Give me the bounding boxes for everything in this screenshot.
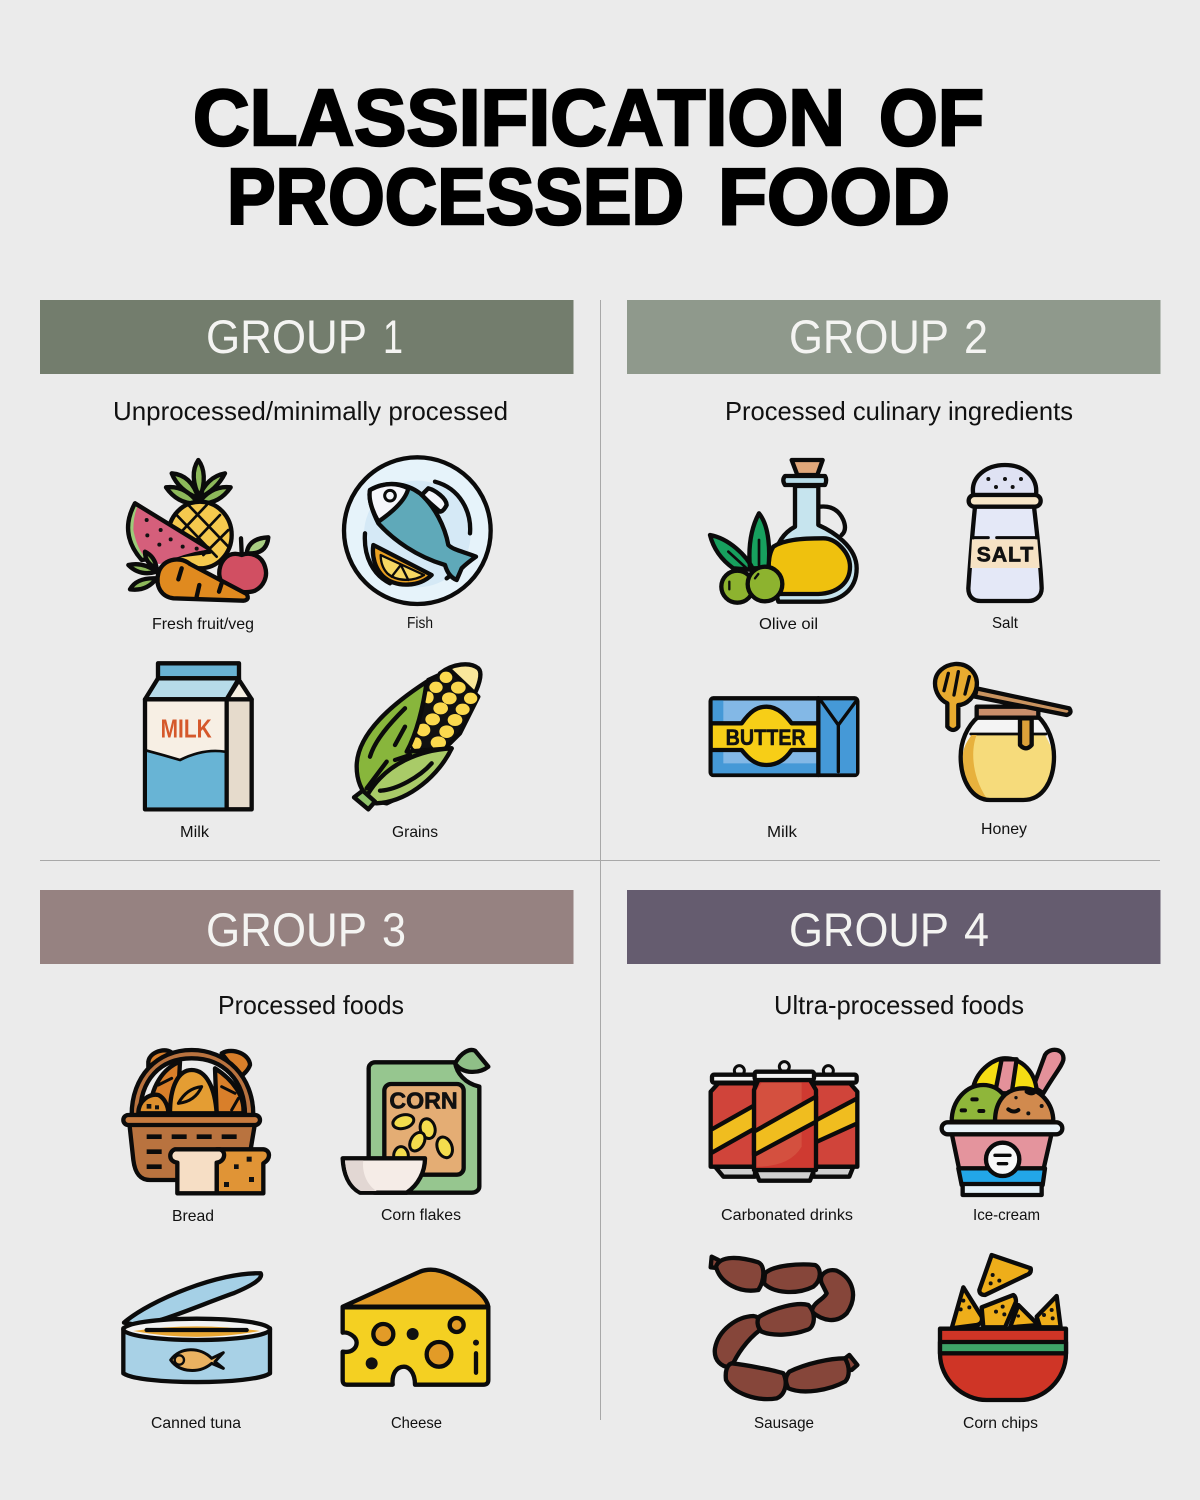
label: fresh fruit/veg: Fresh fruit/veg — [152, 616, 254, 633]
group 3 subtitle: Processed foods — [218, 990, 404, 1020]
title: PROCESSED — [227, 152, 684, 241]
panel: group 2 — [627, 300, 1160, 841]
label: olive oil: Olive oil — [759, 616, 818, 633]
group 4 subtitle: Ultra-processed foods — [774, 990, 1024, 1020]
icon: carbonated drink cans — [711, 1062, 857, 1181]
icon: ice cream cup — [942, 1050, 1063, 1195]
group 2 header: 2 — [964, 310, 988, 363]
label: carbonated drinks: Carbonated drinks — [721, 1207, 853, 1224]
label: canned tuna: Canned tuna — [151, 1415, 241, 1432]
group 2 subtitle: Processed culinary ingredients — [725, 396, 1073, 426]
label: butter (captioned Milk): Milk — [767, 824, 798, 841]
icon: corn chips bowl — [940, 1255, 1066, 1400]
label: corn chips: Corn chips — [963, 1415, 1038, 1432]
title: CLASSIFICATION — [193, 73, 845, 162]
group 4 header — [627, 890, 1160, 964]
label: sausage: Sausage — [754, 1415, 814, 1432]
icon: bread basket — [123, 1050, 269, 1193]
icon: sausages — [711, 1257, 857, 1399]
title: OF — [879, 73, 984, 162]
icon: olive oil — [710, 460, 857, 603]
label: honey: Honey — [981, 821, 1027, 838]
title: FOOD — [718, 152, 950, 241]
panel: group 1 — [40, 300, 574, 841]
label: bread: Bread — [172, 1208, 214, 1225]
icon: milk carton: MILK — [161, 714, 212, 744]
icon: canned tuna — [123, 1273, 270, 1382]
icon: corn flakes box: CORN — [389, 1088, 458, 1114]
icon: corn flakes box — [343, 1050, 488, 1193]
label: grains: Grains — [392, 824, 438, 841]
group 2 header: GROUP — [789, 310, 949, 363]
group 1 header: 1 — [383, 310, 403, 363]
label: corn flakes: Corn flakes — [381, 1207, 461, 1224]
label: cheese: Cheese — [391, 1415, 442, 1432]
icon: salt shaker: SALT — [977, 543, 1033, 567]
group 3 header: GROUP — [206, 903, 367, 956]
icon: butter: BUTTER — [726, 725, 806, 750]
icon: corn cob — [354, 664, 480, 809]
group 2 header — [627, 300, 1160, 374]
group 1 header — [40, 300, 574, 374]
group 3 header — [40, 890, 574, 964]
icon: butter — [711, 698, 857, 775]
group 4 header: GROUP — [789, 903, 949, 956]
label: fish: Fish — [407, 615, 433, 632]
icon: milk carton — [145, 663, 252, 809]
icon: cheese — [343, 1270, 488, 1385]
group 4 header: 4 — [964, 903, 989, 956]
group 3 header: 3 — [382, 903, 406, 956]
icon: salt shaker — [968, 465, 1042, 601]
group 1 subtitle: Unprocessed/minimally processed — [113, 396, 508, 426]
label: ice-cream: Ice-cream — [973, 1207, 1040, 1224]
icon: fresh fruit and vegetables — [128, 460, 268, 601]
panel: group 3 — [40, 890, 574, 1432]
group 1 header: GROUP — [206, 310, 367, 363]
icon: honey jar and dipper — [935, 664, 1071, 800]
label: milk: Milk — [180, 824, 210, 841]
panel: group 4 — [627, 890, 1160, 1432]
icon: fish on a plate — [344, 457, 491, 604]
label: salt: Salt — [992, 615, 1019, 632]
title — [193, 73, 984, 241]
